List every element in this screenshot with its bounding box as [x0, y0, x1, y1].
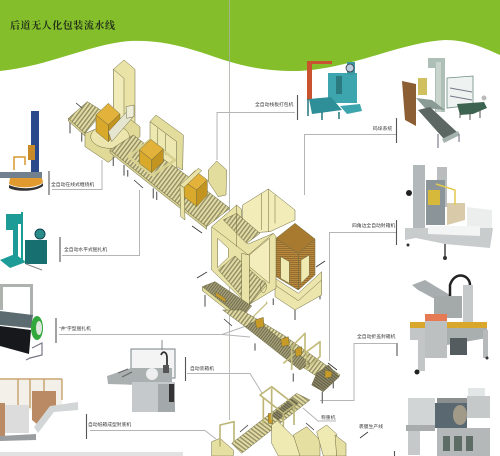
- central isometric packaging line: [68, 60, 346, 456]
- label: 裹膜生产线: 裹膜生产线: [359, 423, 383, 430]
- carton stack: [276, 223, 315, 290]
- machine: cross strapping: [0, 284, 43, 360]
- machine: shrink wrap line: [406, 388, 490, 456]
- label: 全自动栈板打包机: 全自动栈板打包机: [255, 101, 294, 108]
- machine: pallet strapper: [307, 61, 362, 120]
- palletizer back box: [243, 189, 295, 233]
- gates: [283, 333, 320, 370]
- palletizer frame: [212, 205, 276, 305]
- green header band: [0, 0, 500, 71]
- banding station: [128, 115, 183, 175]
- lower conveyor: [223, 310, 340, 453]
- machine: carton erector: [0, 378, 78, 441]
- label: 自动装箱机: 自动装箱机: [190, 365, 214, 372]
- outfeed conveyor: [202, 282, 267, 327]
- label: 井字型捆扎机: “井”字型捆扎机: [59, 325, 91, 332]
- direction arrows: [76, 103, 368, 438]
- leader lines: [52, 112, 396, 439]
- wrapping station: [68, 60, 140, 162]
- weighing frame: [260, 387, 295, 430]
- title: 后道无人化包装流水线: [10, 19, 116, 32]
- label: 自动纸箱成型封底机: 自动纸箱成型封底机: [88, 421, 131, 428]
- label: 全自动水平式捆扎机: 全自动水平式捆扎机: [64, 246, 107, 253]
- label: 码垛系统: 码垛系统: [373, 125, 392, 132]
- machine: four corner sealer: [405, 165, 493, 260]
- bottom yellow units: [212, 421, 346, 456]
- palletizer: [202, 189, 322, 327]
- machine: palletizing system: [402, 58, 487, 148]
- label: 四角边全自动封箱机: 四角边全自动封箱机: [352, 222, 395, 229]
- machine: horizontal strapping: [0, 212, 47, 270]
- machine: flap-folding sealer: [410, 276, 488, 374]
- label: 全自动在线式缠绕机: 全自动在线式缠绕机: [51, 181, 94, 188]
- bottom grey band: [0, 452, 183, 456]
- stack table: [273, 272, 322, 320]
- page fold line: [228, 0, 230, 420]
- machine: online stretch wrapper: [0, 111, 43, 191]
- lower line: [212, 310, 346, 456]
- label: 全自动折盖封箱机: 全自动折盖封箱机: [357, 333, 396, 340]
- label: 称重机: 称重机: [321, 414, 336, 421]
- label bars: [49, 95, 397, 456]
- machine: automatic case packer: [107, 340, 175, 412]
- third station: [180, 161, 227, 220]
- main conveyor: [110, 135, 230, 229]
- upper line stations: [68, 60, 230, 229]
